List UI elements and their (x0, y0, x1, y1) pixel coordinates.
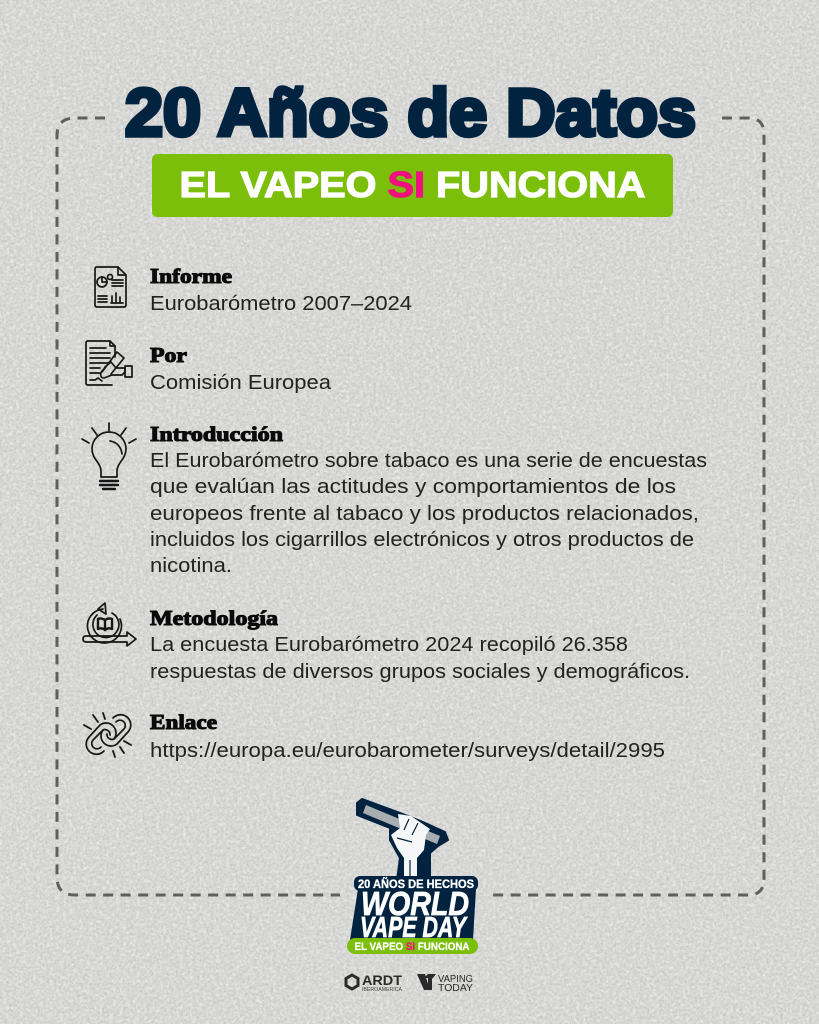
logo banner text: VAPE DAY (360, 912, 468, 944)
text: metodología: respuestas de diversos grupos sociales y demográficos. (150, 661, 690, 683)
logo banner text: WORLD (361, 885, 469, 922)
title: 20 Años de Datos (125, 76, 696, 150)
text: introducción: europeos frente al tabaco y los productos relacionados, (150, 503, 699, 525)
text: introducción (150, 450, 707, 577)
logo: ARDT Iberoamerica: IBEROAMERICA (362, 987, 402, 993)
logo banner text (347, 876, 478, 954)
text: introducción: nicotina. (150, 555, 232, 577)
subtitle banner (152, 154, 673, 217)
text: informe: Eurobarómetro 2007–2024 (150, 293, 412, 315)
logo: ARDT Iberoamerica: ARDT (362, 972, 402, 988)
heading: Por: Por (150, 343, 187, 367)
logo banner text: 20 AÑOS DE HECHOS (358, 878, 474, 891)
text: enlace: https://europa.eu/eurobarometer/surveys/detail/2995 (150, 740, 665, 762)
heading: Metodología: Metodología (150, 606, 279, 630)
text: metodología: La encuesta Eurobarómetro 2024 recopiló 26.358 (150, 634, 628, 656)
logo: Vaping Today: VAPING (438, 973, 473, 985)
subtitle banner: EL VAPEO SI FUNCIONA (180, 164, 646, 205)
heading: Informe: Informe (150, 264, 232, 288)
logo: ARDT Iberoamerica (346, 972, 402, 993)
logo: World Vape Day (347, 799, 478, 954)
text: introducción: que evalúan las actitudes y comportamientos de los (150, 476, 676, 498)
logo fist (357, 799, 448, 880)
heading: Enlace: Enlace (150, 710, 217, 734)
logo: Vaping Today: TODAY (438, 982, 473, 994)
text: introducción: El Eurobarómetro sobre tabaco es una serie de encuestas (150, 450, 707, 472)
heading: Introducción: Introducción (150, 422, 283, 446)
text: metodología (150, 634, 690, 683)
logo banner text: EL VAPEO SI FUNCIONA (354, 941, 470, 953)
logo: Vaping Today (417, 973, 473, 994)
icon: document and signing hand (86, 341, 132, 385)
text: por: Comisión Europea (150, 372, 332, 394)
dashed frame (57, 118, 764, 895)
icon: chain link (84, 713, 131, 757)
icon: light bulb (82, 423, 136, 489)
icon: report document (95, 267, 126, 307)
icon: cycle methodology arrow (83, 603, 136, 646)
text: introducción: incluidos los cigarrillos electrónicos y otros productos de (150, 529, 694, 551)
